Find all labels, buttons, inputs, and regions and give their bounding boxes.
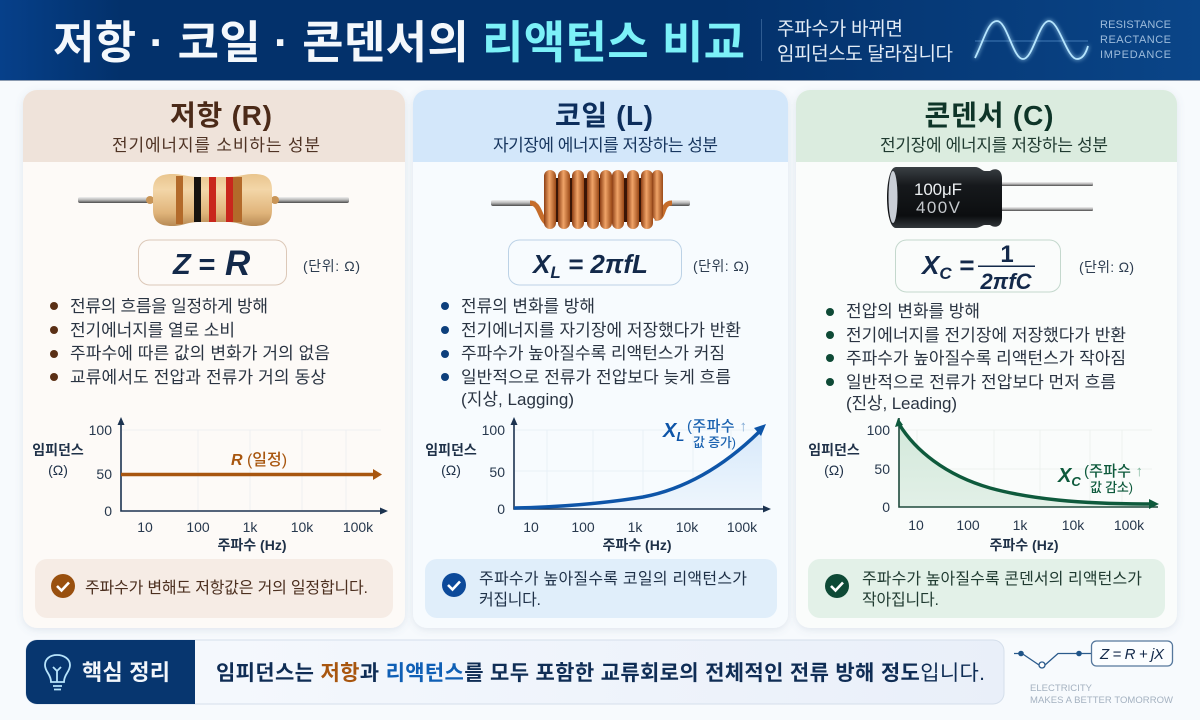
icon: capacitor [887, 167, 1093, 228]
chart: capacitive reactance: 50 [874, 461, 890, 477]
icon: capacitor: 100μF [914, 180, 962, 199]
formula: XL = 2πfL: L [550, 263, 561, 282]
panel: resistor [23, 90, 405, 628]
chart: inductive reactance: 값 증가) [693, 435, 736, 450]
bullet list [441, 297, 741, 409]
chart: inductive reactance: 100 [482, 422, 505, 438]
bullet list: (지상, Lagging) [461, 390, 574, 409]
header keywords: REACTANCE [1100, 34, 1171, 46]
panel: capacitor [796, 90, 1177, 628]
formula: XL = 2πfL: X [533, 249, 550, 279]
unit label: (단위: Ω) [693, 258, 749, 274]
formula: XC = 1/2πfC: 2πfC [979, 269, 1033, 294]
formula: XC = 1/2πfC: X [922, 250, 939, 280]
callout: coil: 커집니다. [479, 591, 541, 609]
chart: capacitive reactance: 값 감소) [1090, 480, 1133, 495]
bullet list [50, 297, 330, 387]
bullet list [826, 302, 1126, 413]
icon: resistor [78, 174, 349, 226]
callout: coil: 주파수가 높아질수록 코일의 리액턴스가 [479, 570, 747, 588]
chart: inductive reactance: (주파수 ↑ [687, 418, 747, 435]
chart: inductive reactance [425, 417, 771, 553]
chart: inductive reactance: 10 [523, 519, 539, 535]
unit label: (단위: Ω) [1079, 259, 1134, 275]
bullet list: 주파수가 높아질수록 리액턴스가 커짐 [461, 344, 725, 363]
bullet list: 전류의 변화를 방해 [461, 297, 595, 316]
icon: light bulb [45, 655, 70, 690]
formula: XC = 1/2πfC [896, 240, 1060, 294]
header keywords: RESISTANCE [1100, 19, 1171, 31]
chart: capacitive reactance: (주파수 ↑ [1084, 463, 1143, 480]
chart: capacitive reactance [808, 418, 1159, 553]
resistor subtitle: 전기에너지를 소비하는 성분 [112, 136, 320, 155]
unit label: (단위: Ω) [303, 258, 360, 274]
chart: capacitive reactance: 1k [1013, 517, 1028, 533]
chart: resistance vs frequency: 10k [291, 519, 314, 535]
header keywords: IMPEDANCE [1100, 49, 1171, 61]
callout: resistor: 주파수가 변해도 저항값은 거의 일정합니다. [85, 579, 368, 597]
chart: capacitive reactance: 임피던스 [808, 442, 860, 458]
callout: capacitor: 작아집니다. [862, 591, 939, 609]
chart: inductive reactance: (Ω) [441, 462, 461, 478]
chart: inductive reactance: L [676, 429, 684, 444]
footer tagline: ELECTRICITY [1030, 683, 1093, 694]
chart: resistance vs frequency: 100 [89, 422, 112, 438]
chart: capacitive reactance: 0 [882, 499, 890, 515]
chart: inductive reactance: X [663, 420, 676, 442]
panel: key takeaway [26, 640, 1004, 704]
chart: resistance vs frequency [32, 417, 388, 553]
bullet list: 전기에너지를 전기장에 저장했다가 반환 [846, 326, 1126, 345]
formula: XC = 1/2πfC: 1 [1000, 241, 1014, 268]
chart: capacitive reactance: 10 [908, 517, 924, 533]
callout: resistor [35, 559, 393, 618]
header subtitle: 임피던스도 달라집니다 [777, 43, 953, 65]
chart: resistance vs frequency: 100k [343, 519, 374, 535]
footer tagline [1030, 683, 1173, 706]
resistor heading: 저항 (R) [170, 100, 272, 131]
bullet list: (진상, Leading) [846, 394, 957, 413]
formula: Z = R [138, 240, 286, 285]
bullet list: 전류의 흐름을 일정하게 방해 [70, 297, 268, 316]
icon: capacitor: 400V [916, 198, 961, 217]
formula: Z = R: R [225, 244, 251, 283]
chart: resistance vs frequency: (Ω) [48, 462, 68, 478]
header subtitle [777, 18, 953, 65]
bullet list: 주파수가 높아질수록 리액턴스가 작아짐 [846, 349, 1126, 368]
title: 저항 · 코일 · 콘덴서의 리액턴스 비교 [53, 17, 745, 68]
bullet list: 전기에너지를 자기장에 저장했다가 반환 [461, 321, 741, 340]
chart: capacitive reactance: 주파수 (Hz) [990, 537, 1058, 553]
chart: inductive reactance: 100 [571, 519, 595, 535]
capacitor heading: 콘덴서 (C) [924, 100, 1054, 131]
panel: coil [413, 90, 788, 628]
formula: Z = R: = [198, 249, 215, 281]
coil heading: 코일 (L) [555, 100, 653, 131]
callout: capacitor [808, 559, 1165, 618]
formula: XL = 2πfL [508, 240, 682, 285]
chart: inductive reactance: 임피던스 [425, 442, 477, 458]
chart: resistance vs frequency: 주파수 (Hz) [218, 537, 286, 553]
chart: capacitive reactance: X [1058, 465, 1071, 487]
chart: resistance vs frequency: 1k [243, 519, 258, 535]
callout: capacitor: 주파수가 높아질수록 콘덴서의 리액턴스가 [862, 570, 1142, 588]
bullet list: 전압의 변화를 방해 [846, 302, 980, 321]
chart: capacitive reactance: 10k [1062, 517, 1085, 533]
chart: capacitive reactance: (Ω) [824, 462, 844, 478]
chart: capacitive reactance: 100 [956, 517, 980, 533]
bullet list: 주파수에 따른 값의 변화가 거의 없음 [70, 344, 330, 363]
takeaway label: 핵심 정리 [82, 660, 170, 685]
formula: XL = 2πfL: = 2πfL [561, 249, 648, 279]
coil subtitle: 자기장에 에너지를 저장하는 성분 [493, 136, 718, 155]
chart: capacitive reactance: C [1071, 474, 1081, 489]
chart: inductive reactance: 1k [628, 519, 643, 535]
chart: inductive reactance: 100k [727, 519, 758, 535]
footer formula mark: Z = R + jX [1099, 646, 1165, 663]
header subtitle: 주파수가 바뀌면 [777, 18, 903, 40]
formula: Z = R: Z [172, 249, 192, 281]
bullet list: 전기에너지를 열로 소비 [70, 321, 235, 340]
capacitor subtitle: 전기장에 에너지를 저장하는 성분 [880, 136, 1108, 155]
formula: XC = 1/2πfC: C [939, 264, 952, 283]
icon: coil [491, 170, 690, 229]
chart: inductive reactance: 0 [497, 501, 505, 517]
chart: resistance vs frequency: R (일정) [231, 451, 287, 469]
takeaway text: 임피던스는 저항과 리액턴스를 모두 포함한 교류회로의 전체적인 전류 방해 정도입니다. [216, 662, 985, 685]
chart: capacitive reactance: 100k [1114, 517, 1145, 533]
formula: XC = 1/2πfC: = [952, 250, 974, 280]
chart: resistance vs frequency: 0 [104, 503, 112, 519]
bullet list: 일반적으로 전류가 전압보다 늦게 흐름 [461, 368, 731, 387]
callout: coil [425, 559, 777, 618]
chart: resistance vs frequency: 10 [137, 519, 153, 535]
chart: inductive reactance: 주파수 (Hz) [603, 537, 671, 553]
bullet list: 교류에서도 전압과 전류가 거의 동상 [70, 368, 326, 387]
chart: inductive reactance: 10k [676, 519, 699, 535]
header banner [0, 0, 1200, 81]
footer formula mark [1014, 641, 1172, 668]
header keywords [1100, 19, 1171, 61]
chart: inductive reactance: 50 [489, 464, 505, 480]
icon: sine wave [975, 21, 1088, 59]
footer tagline: MAKES A BETTER TOMORROW [1030, 695, 1173, 706]
chart: capacitive reactance: 100 [867, 422, 890, 438]
chart: resistance vs frequency: 임피던스 [32, 442, 84, 458]
chart: resistance vs frequency: 100 [186, 519, 210, 535]
bullet list: 일반적으로 전류가 전압보다 먼저 흐름 [846, 373, 1116, 392]
chart: resistance vs frequency: 50 [96, 466, 112, 482]
